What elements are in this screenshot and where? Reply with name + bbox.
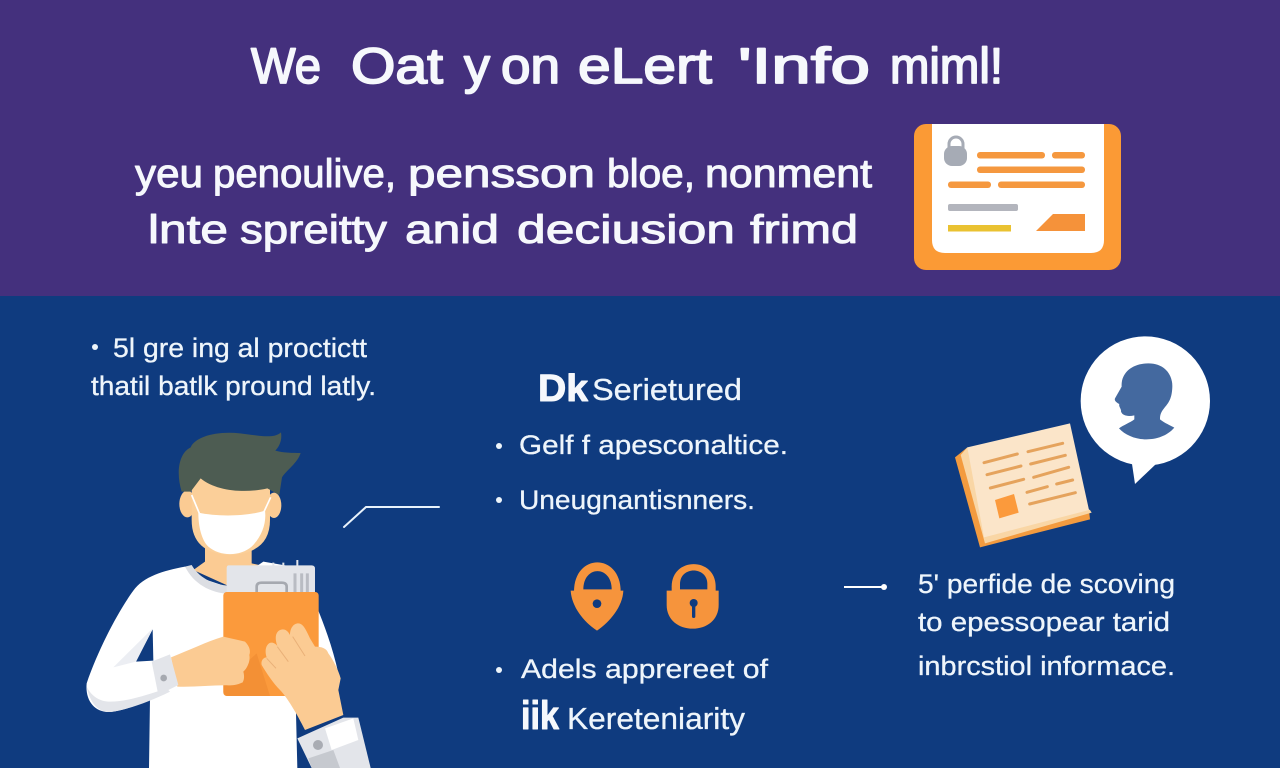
left hand xyxy=(171,637,250,687)
arm gap xyxy=(136,629,153,662)
hair xyxy=(179,432,301,495)
heading: centre column: Serietured xyxy=(592,372,742,407)
right text block: to epessopear tarid xyxy=(918,607,1170,637)
title: miml! xyxy=(890,38,1003,94)
heading: centre column: Dk xyxy=(538,368,589,410)
title: We xyxy=(251,38,321,94)
cuff xyxy=(152,654,178,695)
title: y xyxy=(464,38,490,94)
right cuff xyxy=(297,718,371,768)
centre bottom text xyxy=(496,654,769,738)
subtitle: lnte xyxy=(148,208,228,252)
illustration: person with mask holding folder xyxy=(86,432,371,768)
torso and arm xyxy=(86,562,338,768)
icon: padlocks xyxy=(571,562,719,631)
mask xyxy=(198,511,265,554)
right text block: 5' perfide de scoving xyxy=(918,569,1175,599)
centre bottom text: iik xyxy=(521,694,560,738)
subtitle: nonment xyxy=(705,152,872,196)
heading: centre column xyxy=(538,368,742,410)
centre bullet list: Uneugnantisnners. xyxy=(519,485,755,515)
title: on xyxy=(501,38,560,94)
panel: purple header xyxy=(0,0,1280,296)
face xyxy=(192,477,270,555)
centre bullet list: Gelf f apesconaltice. xyxy=(519,430,788,460)
subtitle: pensson xyxy=(408,152,595,196)
arm shadow xyxy=(87,687,170,712)
icon: open book xyxy=(955,423,1092,547)
papers xyxy=(227,565,315,597)
subtitle: anid xyxy=(405,208,499,252)
subtitle: frimd xyxy=(750,208,858,252)
centre bottom text: Kereteniarity xyxy=(567,701,746,736)
subtitle: deciusion xyxy=(517,208,735,252)
title: 'Info xyxy=(738,38,870,94)
connector line from person xyxy=(344,507,439,527)
icon: speech bubble with head silhouette xyxy=(1081,336,1210,484)
panel: blue body xyxy=(0,296,1280,768)
centre bullet list xyxy=(496,430,788,515)
right hand xyxy=(261,623,343,730)
title: Oat xyxy=(351,38,443,94)
title xyxy=(251,38,1003,94)
folder xyxy=(223,592,319,696)
left text block: 5l gre ing al proctictt xyxy=(113,333,368,363)
collar xyxy=(185,565,230,594)
right text block: inbrcstiol informace. xyxy=(918,651,1175,681)
title: eLert xyxy=(578,38,712,94)
subtitle: penoulive, xyxy=(213,152,396,196)
left text block: thatil batlk pround latly. xyxy=(91,371,376,401)
icon: round padlock xyxy=(667,564,719,629)
icon: shield padlock xyxy=(571,562,623,631)
icon: document card with padlock xyxy=(914,124,1121,270)
neck xyxy=(193,547,267,587)
subtitle: bloe, xyxy=(607,152,695,196)
subtitle: spreitty xyxy=(240,208,387,252)
right text block xyxy=(918,569,1175,681)
ears xyxy=(179,491,281,518)
arrow to right text xyxy=(844,584,887,590)
left text block xyxy=(91,333,376,401)
subtitle: yeu xyxy=(135,152,203,196)
subtitle xyxy=(135,152,872,252)
centre bottom text: Adels apprereet of xyxy=(521,654,769,684)
